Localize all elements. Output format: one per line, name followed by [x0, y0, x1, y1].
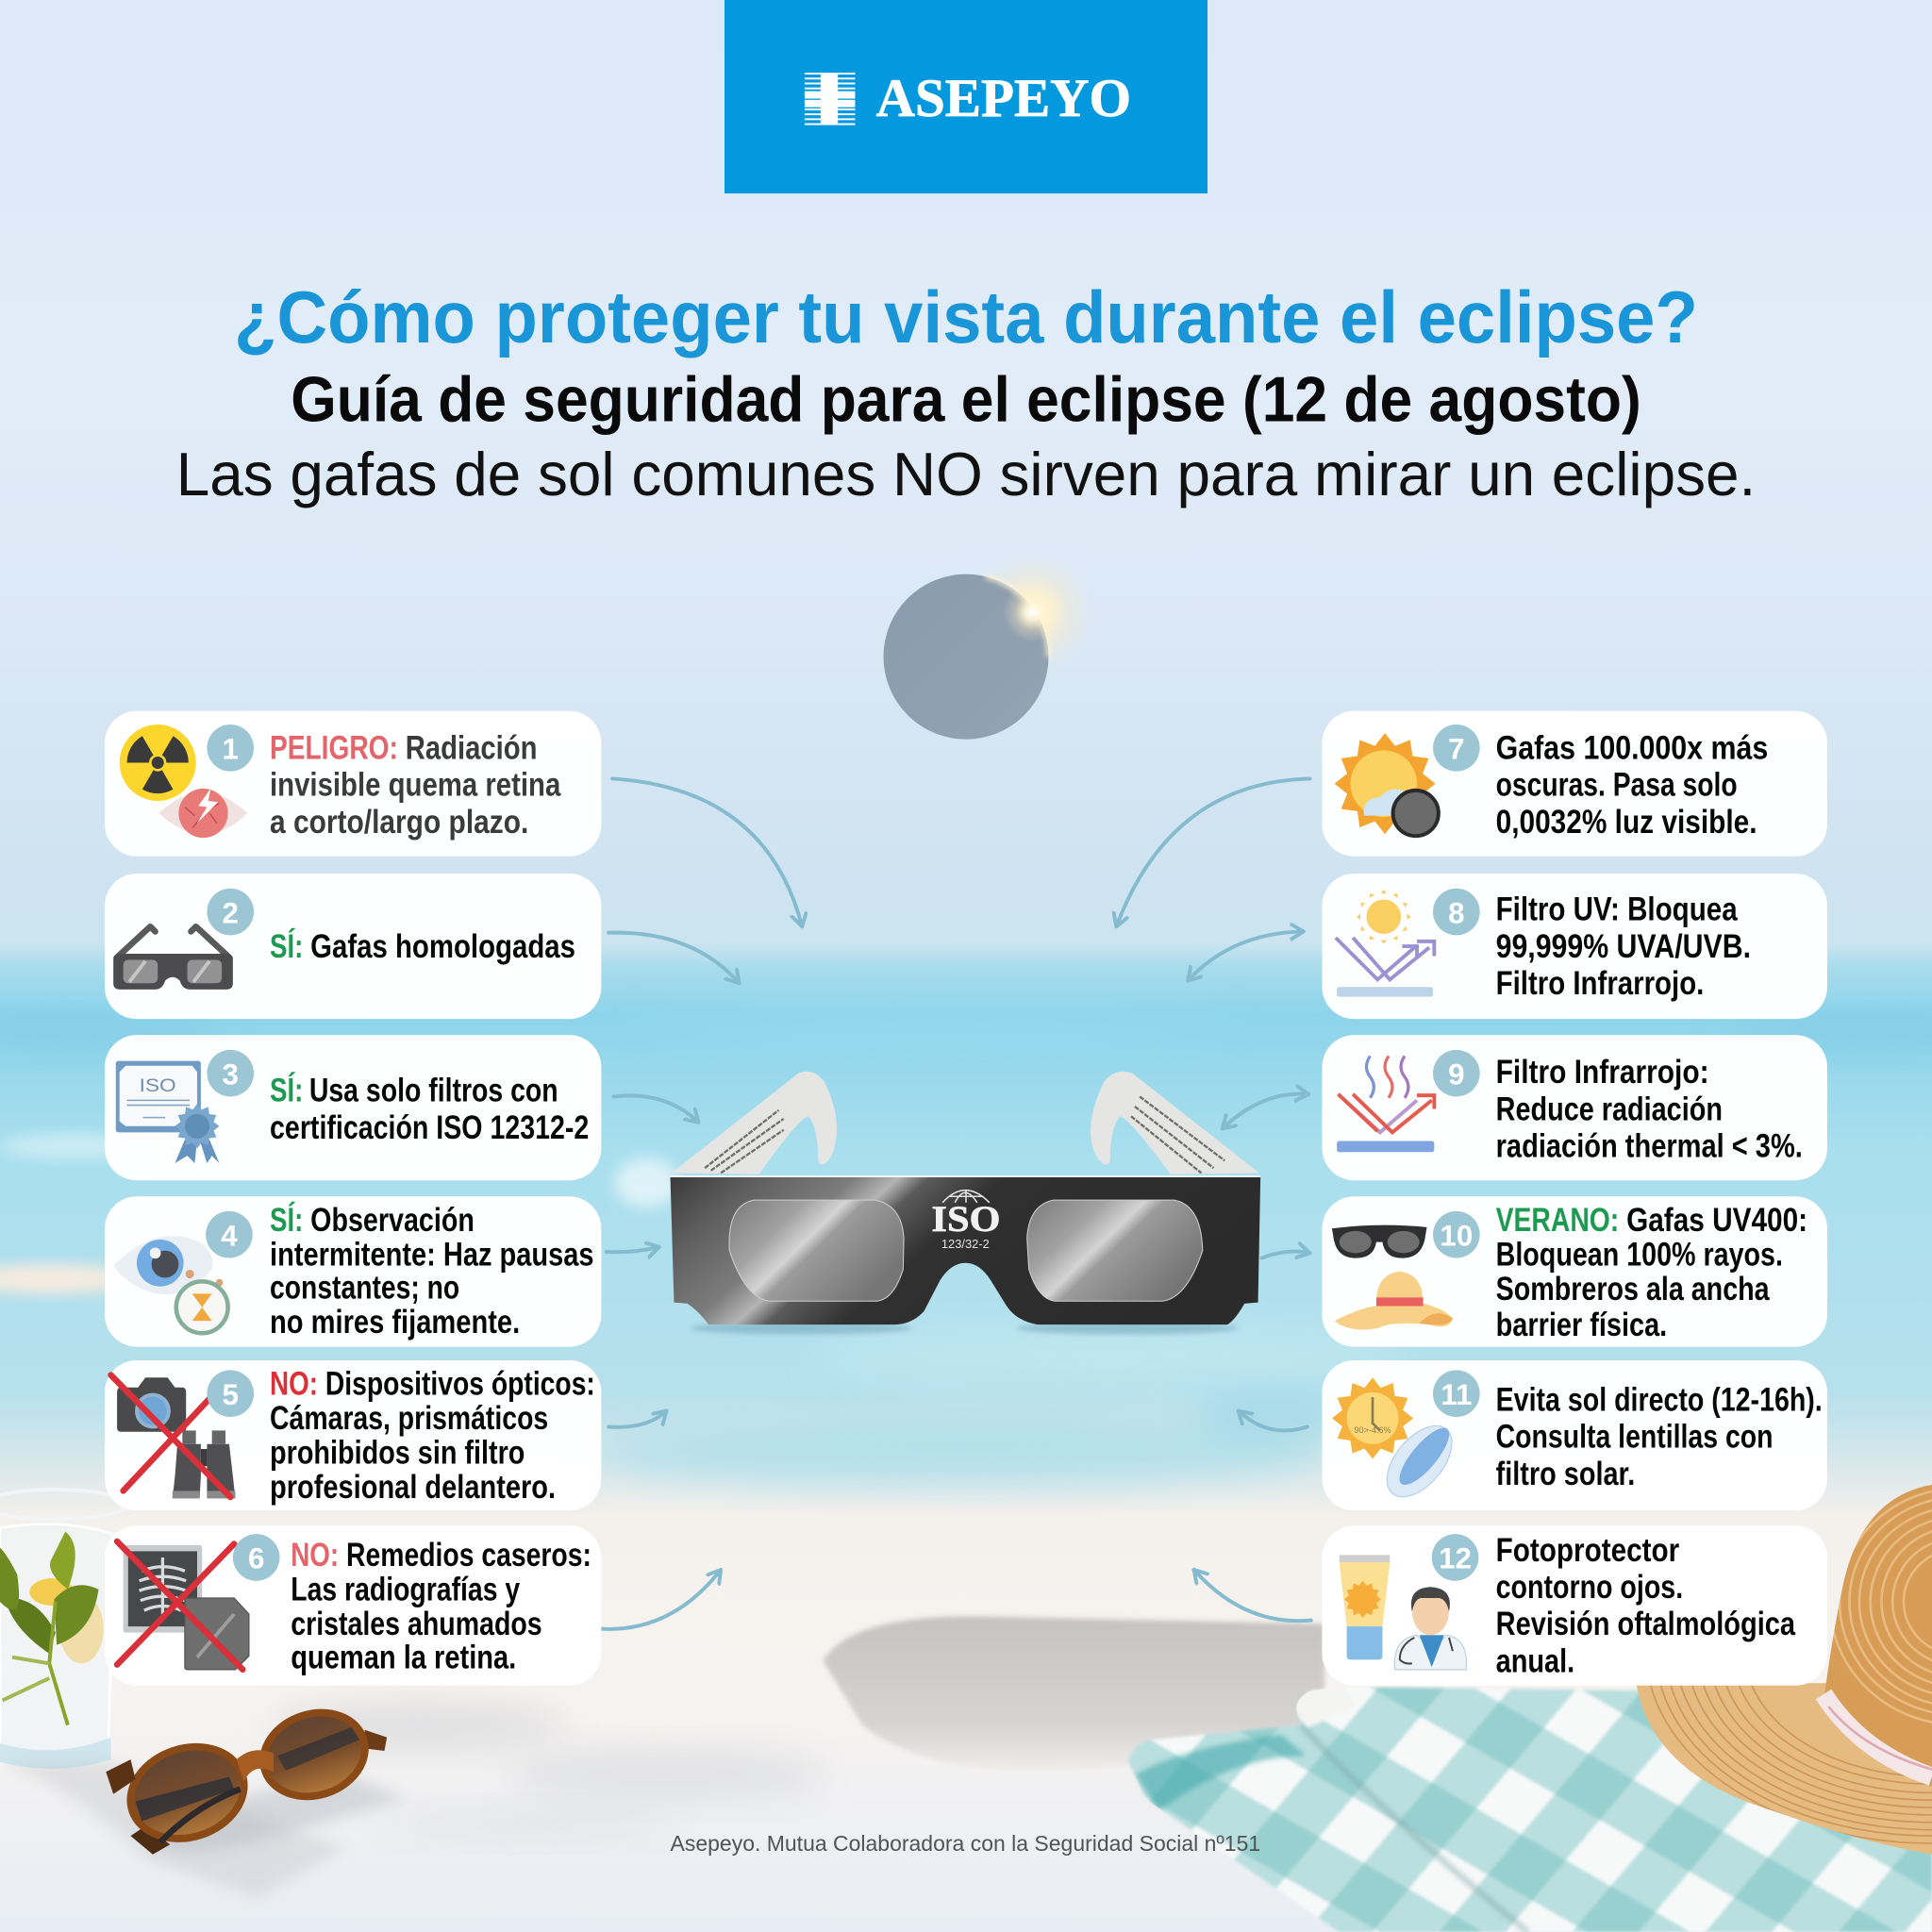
text 1: a corto/largo plazo.: [270, 804, 528, 841]
text 12: Fotoprotector: [1496, 1532, 1679, 1569]
footer: Asepeyo. Mutua Colaboradora con la Seguridad Social nº151: [671, 1831, 1260, 1856]
text 9: radiación thermal < 3%.: [1496, 1127, 1803, 1164]
right arm: [1091, 1072, 1259, 1174]
text 9: Reduce radiación: [1496, 1091, 1723, 1127]
panel: card 12: [1322, 1525, 1827, 1686]
icon: infrared filter: [1337, 1056, 1434, 1152]
text 1: invisible quema retina: [270, 767, 561, 804]
panel: card 6: [105, 1525, 601, 1686]
ISO mark: ISO: [931, 1199, 1001, 1240]
badge 4: [206, 1211, 253, 1258]
text 7: 0,0032% luz visible.: [1496, 804, 1757, 841]
text 8: Filtro Infrarrojo.: [1496, 965, 1704, 1002]
right lens: [1027, 1200, 1203, 1301]
text 10: Sombreros ala ancha: [1496, 1271, 1770, 1307]
subtitle: Guía de seguridad para el eclipse (12 de agosto): [291, 365, 1641, 436]
badge 2: [207, 889, 254, 935]
ISO globe: [942, 1191, 990, 1203]
text 12: [1496, 1532, 1795, 1679]
badge 6: 6: [248, 1542, 264, 1575]
badge 9: 9: [1448, 1058, 1465, 1091]
panel: card 7: [1322, 711, 1827, 857]
badge 8: [1433, 889, 1480, 935]
badge 8: 8: [1448, 896, 1465, 929]
text 3: [270, 1072, 589, 1146]
icon: camera and binoculars crossed: [111, 1375, 235, 1498]
text 11: Consulta lentillas con: [1496, 1419, 1774, 1456]
text 12: Revisión oftalmológica: [1496, 1606, 1795, 1642]
badge 4: 4: [221, 1219, 238, 1252]
text 5: Dispositivos ópticos:: [325, 1366, 595, 1403]
text 11: [1496, 1382, 1823, 1492]
icon: sun with filter lens: [1335, 733, 1439, 836]
left arm: [672, 1072, 837, 1174]
badge 10: [1433, 1211, 1480, 1258]
panel: card 10: [1322, 1196, 1827, 1347]
brown tortoise sunglasses: [106, 1700, 407, 1855]
text 10: Bloquean 100% rayos.: [1496, 1236, 1783, 1273]
panel: card 8: [1322, 874, 1827, 1019]
text 10: [1496, 1202, 1807, 1343]
text 5: [270, 1366, 595, 1506]
badge 3: [207, 1050, 254, 1096]
text 3: Usa solo filtros con: [309, 1073, 558, 1109]
towel: [1128, 1683, 1932, 1932]
text 5: Cámaras, prismáticos: [270, 1400, 548, 1437]
icon: clock sun and contact lens: [1332, 1377, 1464, 1508]
arrows right: [1116, 778, 1311, 1621]
badge 11: [1433, 1370, 1480, 1417]
text 10: VERANO:: [1496, 1202, 1619, 1239]
text 7: [1496, 730, 1768, 841]
icon: sunscreen tube and doctor: [1340, 1555, 1467, 1670]
panel: card 2: [105, 874, 601, 1019]
text 4: [270, 1201, 594, 1341]
logo wordmark: ASEPEYO: [876, 69, 1131, 128]
text 11: filtro solar.: [1496, 1456, 1635, 1492]
text 8: [1496, 891, 1751, 1002]
text 9: Filtro Infrarrojo:: [1496, 1054, 1709, 1091]
badge 5: 5: [223, 1378, 239, 1411]
badge 9: [1433, 1050, 1480, 1096]
badge 6: [233, 1534, 279, 1581]
panel: card 5: [105, 1360, 601, 1510]
text 1: [270, 730, 561, 841]
text 5: NO:: [270, 1366, 318, 1403]
panel: card 9: [1322, 1035, 1827, 1180]
text 6: Remedios caseros:: [346, 1537, 591, 1574]
text 9: [1496, 1054, 1803, 1164]
text 7: Gafas 100.000x más: [1496, 730, 1768, 767]
icon: striped cross: [805, 73, 855, 125]
panel: card 4: [105, 1196, 601, 1347]
shadow on the sand: [823, 1617, 1324, 1771]
header logo block: [724, 0, 1208, 193]
badge 7: [1433, 724, 1480, 772]
text 12: anual.: [1496, 1642, 1574, 1679]
text 2: Gafas homologadas: [310, 928, 575, 965]
text 10: Gafas UV400:: [1626, 1202, 1807, 1239]
text 4: SÍ:: [270, 1201, 303, 1239]
arrows left: [601, 778, 802, 1629]
text 3: certificación ISO 12312-2: [270, 1109, 589, 1146]
eclipse glasses: [671, 1072, 1260, 1335]
badge 12: [1432, 1534, 1478, 1581]
front frame: [671, 1176, 1260, 1324]
text 4: Observación: [310, 1202, 475, 1239]
text 4: no mires fijamente.: [270, 1304, 520, 1341]
badge 3: 3: [223, 1058, 239, 1091]
badge 10: 10: [1440, 1219, 1473, 1252]
text 4: intermitente: Haz pausas: [270, 1236, 594, 1273]
icon: radiation and burned eye: [119, 724, 248, 838]
icon: clock sun and contact lens: 90>-4.6%: [1354, 1425, 1391, 1435]
text 8: Filtro UV: Bloquea: [1496, 891, 1738, 928]
text 7: oscuras. Pasa solo: [1496, 767, 1738, 804]
text 6: NO:: [291, 1537, 339, 1574]
badge 5: [207, 1370, 254, 1417]
panel: card 3: [105, 1035, 601, 1180]
icon: x-ray and smoked glass crossed: [117, 1541, 249, 1670]
panel: card 1: [105, 711, 601, 857]
badge 2: 2: [223, 896, 239, 929]
text 5: profesional delantero.: [270, 1469, 556, 1506]
eclipse sun: [883, 553, 1091, 740]
icon: eye and stopwatch: [113, 1236, 228, 1333]
badge 1: [207, 724, 254, 772]
left lens: [729, 1200, 904, 1301]
badge 1: 1: [223, 733, 239, 766]
text 3: SÍ:: [270, 1072, 303, 1109]
straw hat: [1637, 1458, 1932, 1855]
badge 12: 12: [1439, 1542, 1472, 1575]
icon: ISO certificate: [116, 1061, 219, 1163]
text 6: cristales ahumados: [291, 1606, 542, 1642]
text 1: Radiación: [406, 730, 537, 767]
text 1: PELIGRO:: [270, 730, 398, 767]
title: ¿Cómo proteger tu vista durante el eclipse?: [234, 275, 1698, 358]
text 10: barrier física.: [1496, 1307, 1667, 1343]
text 12: contorno ojos.: [1496, 1569, 1683, 1606]
text 6: Las radiografías y: [291, 1572, 520, 1608]
text 6: [291, 1537, 591, 1675]
panel: card 11: [1322, 1360, 1827, 1510]
text 8: 99,999% UVA/UVB.: [1496, 928, 1751, 965]
glass with leaves: [0, 1490, 345, 1897]
warning line: Las gafas de sol comunes NO sirven para mirar un eclipse.: [176, 440, 1756, 508]
icon: UV filter: [1336, 890, 1434, 997]
badge 7: 7: [1448, 733, 1465, 766]
text 11: Evita sol directo (12-16h).: [1496, 1382, 1823, 1419]
icon: ISO certificate: ISO: [140, 1075, 176, 1096]
ISO code: 123/32-2: [941, 1237, 990, 1251]
text 4: constantes; no: [270, 1270, 459, 1307]
text 5: prohibidos sin filtro: [270, 1435, 525, 1472]
text 6: queman la retina.: [291, 1639, 516, 1675]
badge 11: 11: [1441, 1378, 1472, 1411]
icon: 3D glasses: [113, 926, 233, 990]
icon: sunglasses and hat: [1332, 1225, 1453, 1329]
text 2: SÍ:: [270, 927, 303, 965]
